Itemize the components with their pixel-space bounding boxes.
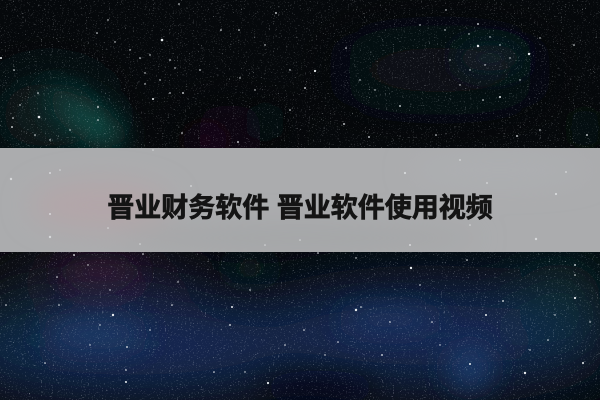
banner (0, 148, 600, 252)
title: 晋业财务软件 晋业软件使用视频 (107, 193, 493, 223)
